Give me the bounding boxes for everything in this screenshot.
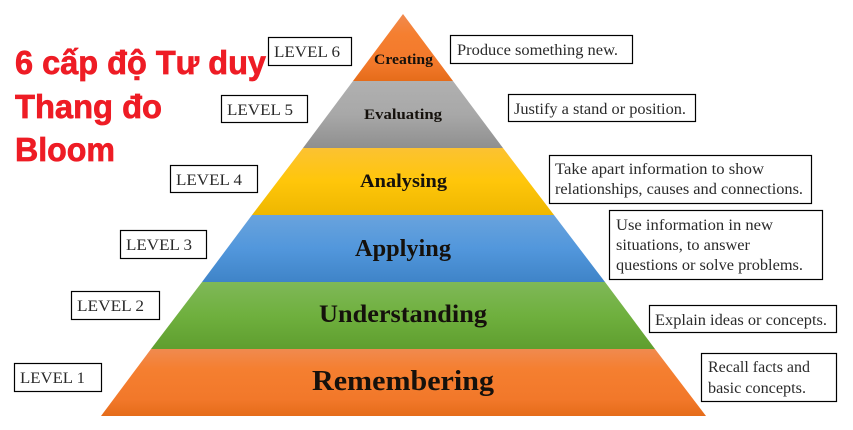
description: Creating: Produce something new. [457,42,618,59]
level 1 label [14,364,102,392]
description: Analysing: Take apart information to show [555,161,765,178]
description: Analysing: relationships, causes and connections. [555,181,803,198]
description: Evaluating: Justify a stand or position. [514,101,686,118]
description: Applying: Use information in new [616,217,774,234]
description: Understanding [650,306,836,332]
description: Analysing [550,156,812,204]
pyramid [101,14,706,416]
description: Evaluating [508,94,696,122]
level 6 label [268,38,352,66]
tier: Applying: Applying [355,236,451,262]
description: Understanding: Explain ideas or concepts. [655,312,827,329]
tier: Evaluating: Evaluating [364,107,443,123]
tier: Applying [202,215,605,282]
level 5 label [222,96,308,122]
level 3 label [120,230,206,258]
level 3 label: LEVEL 3 [126,237,192,254]
tier: Remembering [101,349,706,416]
level 4 label: LEVEL 4 [176,172,242,189]
description: Applying: situations, to answer [616,237,751,254]
description: Applying: questions or solve problems. [616,257,803,274]
tier: Understanding [151,282,655,349]
level 1 label: LEVEL 1 [20,370,85,387]
title: Thang đo [15,88,162,125]
level 2 label: LEVEL 2 [77,298,144,315]
level 2 label [72,292,160,320]
tier: Creating [353,14,453,81]
level 5 label: LEVEL 5 [227,102,293,119]
level 4 label [170,166,258,192]
description: Applying [610,210,822,280]
description: Creating [450,36,632,64]
tier: Creating: Creating [374,52,434,68]
description: Remembering: Recall facts and [708,359,810,376]
tier: Analysing [252,148,554,215]
tier: Evaluating [303,81,503,148]
title [15,44,267,168]
tier: Analysing: Analysing [360,171,448,192]
level 6 label: LEVEL 6 [274,44,340,61]
tier: Understanding: Understanding [319,301,488,328]
description: Remembering [702,354,836,402]
title: 6 cấp độ Tư duy [15,44,267,81]
description: Remembering: basic concepts. [708,380,806,397]
title: Bloom [15,131,115,168]
tier: Remembering: Remembering [312,366,494,397]
